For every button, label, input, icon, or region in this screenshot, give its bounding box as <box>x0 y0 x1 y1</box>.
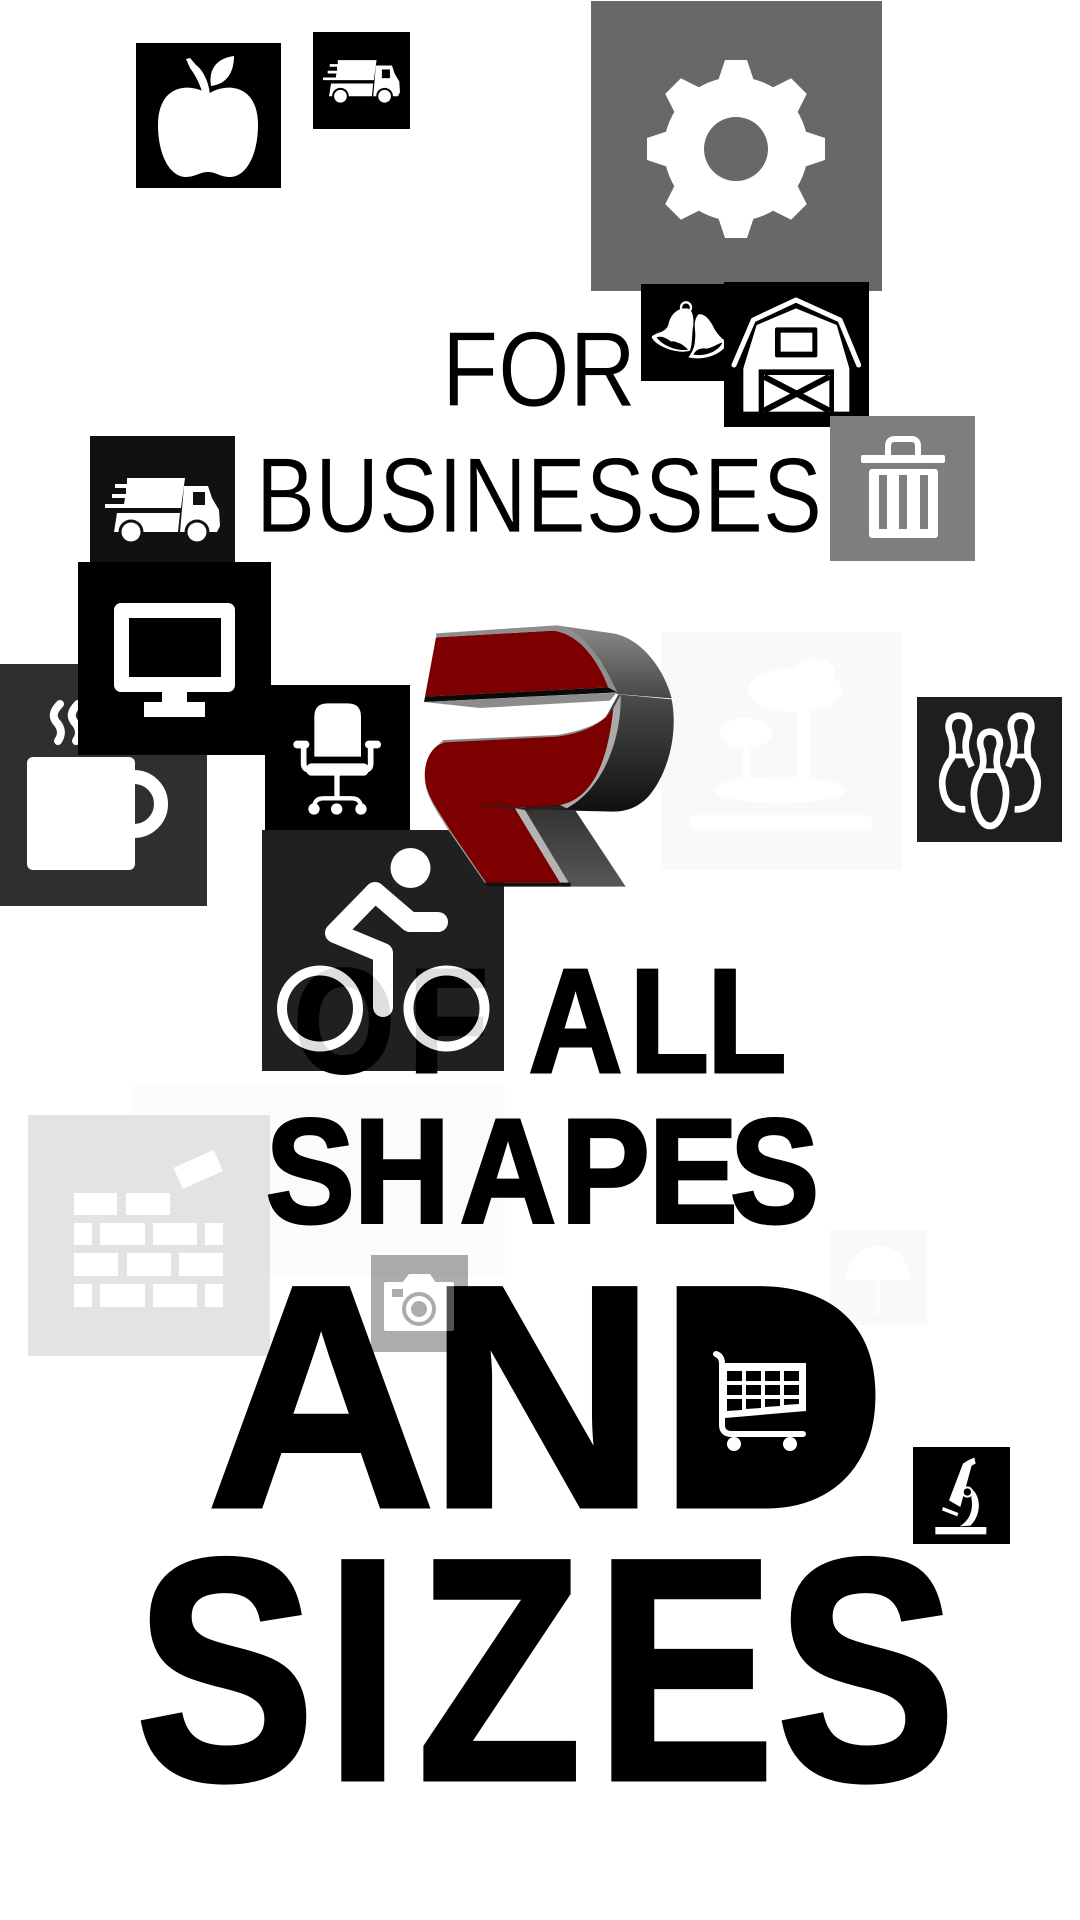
icon tile: umbrella <box>830 1230 927 1325</box>
icon tile: bells <box>641 284 738 381</box>
icon tile: trash can <box>830 416 975 561</box>
icon tile: monitor <box>78 562 271 755</box>
icon tile: bowling pins <box>917 697 1062 842</box>
heading: SHAPES: SHAPES <box>266 1089 819 1255</box>
icon tile: palm island <box>661 632 902 870</box>
icon tile: camera <box>371 1255 468 1352</box>
icon tile: coffee mug <box>0 664 207 906</box>
heading: OF ALL: OF ALL <box>293 938 787 1104</box>
logo: red and grey 3D letter R <box>424 625 674 887</box>
icon tile: delivery truck <box>90 436 235 581</box>
icon tile: cyclist <box>262 830 504 1071</box>
icon tile: shopping cart <box>687 1316 832 1474</box>
heading: AND: AND <box>207 1220 886 1573</box>
icon tile: brick wall <box>28 1115 270 1356</box>
heading: FOR: FOR <box>442 309 636 429</box>
icon tile: gear <box>591 1 882 291</box>
icon tile: small delivery truck <box>313 32 410 129</box>
heading: BUSINESSES: BUSINESSES <box>256 435 822 555</box>
heading: SIZES: SIZES <box>135 1495 956 1847</box>
icon tile: office chair <box>265 685 410 830</box>
icon tile: apple <box>136 43 281 188</box>
icon tile: barn <box>724 282 869 427</box>
icon tile: microscope <box>913 1447 1010 1544</box>
faint background panel <box>131 1086 505 1276</box>
